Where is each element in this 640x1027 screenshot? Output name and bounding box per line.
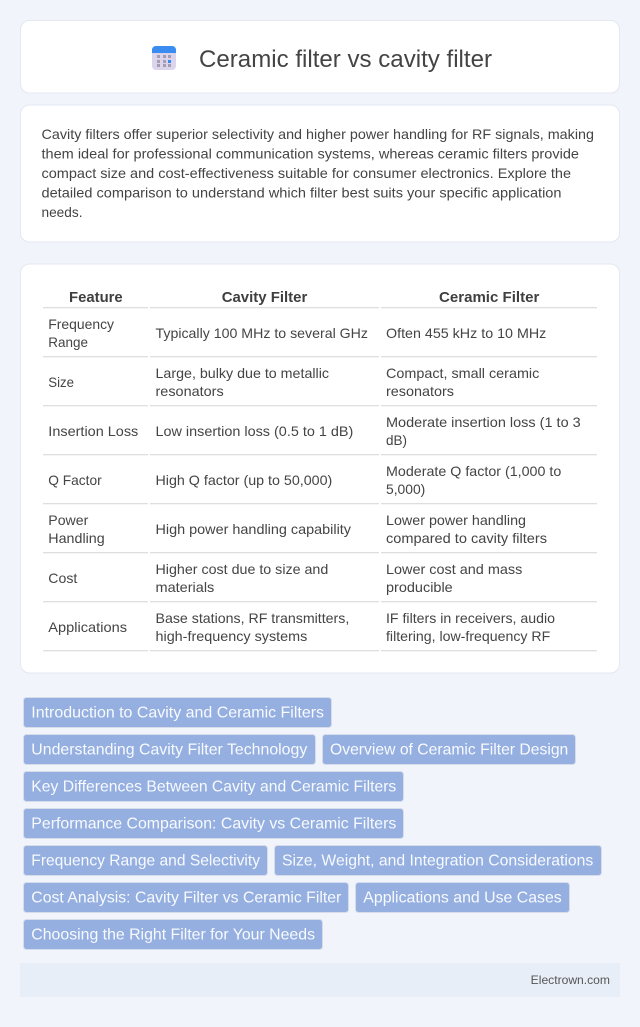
table header row: Cavity Filter: [222, 289, 307, 306]
row: insertion loss: Low insertion loss (0.5 to 1 dB): [156, 423, 353, 439]
intro paragraph: them ideal for professional communication systems, whereas ceramic filters provide: [42, 146, 579, 162]
row: applications: IF filters in receivers, audio: [386, 610, 555, 626]
tag: frequency range: Frequency Range and Selectivity: [31, 853, 260, 870]
row: applications: [43, 610, 597, 651]
intro paragraph: compact size and cost-effectiveness suitable for consumer electronics. Explore the: [42, 165, 571, 181]
row: frequency range: [43, 316, 597, 357]
tag: cavity technology: Understanding Cavity Filter Technology: [31, 742, 307, 759]
tag: applications: [356, 882, 570, 912]
tag: introduction: [24, 698, 332, 728]
row: power handling: compared to cavity filters: [386, 530, 547, 546]
tag: introduction: Introduction to Cavity and Ceramic Filters: [31, 705, 324, 722]
row: size: Compact, small ceramic: [386, 365, 539, 381]
intro paragraph: [42, 126, 594, 220]
table header row: [43, 289, 597, 308]
row: applications: Base stations, RF transmitters,: [156, 610, 349, 626]
row: power handling: Handling: [48, 530, 105, 546]
row: insertion loss: dB): [386, 432, 407, 448]
row: power handling: Lower power handling: [386, 512, 526, 528]
row: power handling: High power handling capability: [156, 521, 351, 537]
row: frequency range: Typically 100 MHz to several GHz: [156, 325, 368, 341]
intro paragraph: needs.: [42, 204, 82, 220]
row: cost: materials: [156, 579, 214, 595]
row: frequency range: Range: [48, 334, 88, 350]
row: size: resonators: [156, 383, 224, 399]
tag: performance: Performance Comparison: Cavity vs Ceramic Filters: [31, 816, 396, 833]
panel: comparison table: [20, 264, 620, 673]
row: cost: producible: [386, 579, 453, 595]
tag: cavity technology: [24, 734, 316, 764]
row: size: Size: [48, 374, 74, 390]
icon: calendar: [152, 46, 176, 70]
tag: cost analysis: Cost Analysis: Cavity Filter vs Ceramic Filter: [31, 890, 342, 907]
tag: size and weight: Size, Weight, and Integration Considerations: [282, 853, 593, 870]
topic tags: [24, 698, 602, 950]
row: insertion loss: [43, 414, 597, 455]
table header row: Feature: [69, 289, 123, 306]
row: size: Large, bulky due to metallic: [156, 365, 329, 381]
panel: header: [20, 20, 620, 93]
row: cost: [43, 561, 597, 602]
tag: choosing: Choosing the Right Filter for Your Needs: [31, 927, 315, 944]
row: applications: Applications: [48, 619, 127, 635]
tag: key differences: Key Differences Between Cavity and Ceramic Filters: [31, 779, 396, 796]
row: frequency range: Frequency: [48, 316, 114, 332]
row: q factor: 5,000): [386, 481, 425, 497]
row: frequency range: Often 455 kHz to 10 MHz: [386, 325, 546, 341]
row: cost: Cost: [48, 570, 77, 586]
row: insertion loss: Insertion Loss: [48, 423, 138, 439]
row: q factor: Q Factor: [48, 472, 102, 488]
table header row: Ceramic Filter: [439, 289, 539, 306]
row: power handling: Power: [48, 512, 89, 528]
row: q factor: Moderate Q factor (1,000 to: [386, 463, 562, 479]
row: power handling: [43, 512, 597, 553]
row: insertion loss: Moderate insertion loss (1 to 3: [386, 414, 581, 430]
tag: ceramic design: [322, 734, 576, 764]
tag: size and weight: [274, 846, 602, 876]
row: cost: Higher cost due to size and: [156, 561, 328, 577]
row: q factor: [43, 463, 597, 504]
panel: intro text: [20, 105, 620, 242]
tag: ceramic design: Overview of Ceramic Filter Design: [330, 742, 568, 759]
tag: choosing: [24, 920, 322, 950]
footer: Electrown.com: [531, 973, 610, 987]
tag: cost analysis: [24, 882, 348, 912]
tag: applications: Applications and Use Cases: [363, 890, 562, 907]
intro paragraph: Cavity filters offer superior selectivity and higher power handling for RF signals, making: [42, 126, 594, 142]
title: Ceramic filter vs cavity filter: [199, 46, 492, 73]
footer: [20, 963, 620, 997]
intro paragraph: detailed comparison to understand which filter best suits your specific application: [42, 184, 562, 200]
row: applications: filtering, low-frequency RF: [386, 628, 550, 644]
row: size: resonators: [386, 383, 454, 399]
tag: frequency range: [24, 846, 268, 876]
row: cost: Lower cost and mass: [386, 561, 522, 577]
tag: performance: [24, 808, 404, 838]
row: size: [43, 365, 597, 406]
tag: key differences: [24, 772, 404, 802]
row: q factor: High Q factor (up to 50,000): [156, 472, 332, 488]
row: applications: high-frequency systems: [156, 628, 307, 644]
